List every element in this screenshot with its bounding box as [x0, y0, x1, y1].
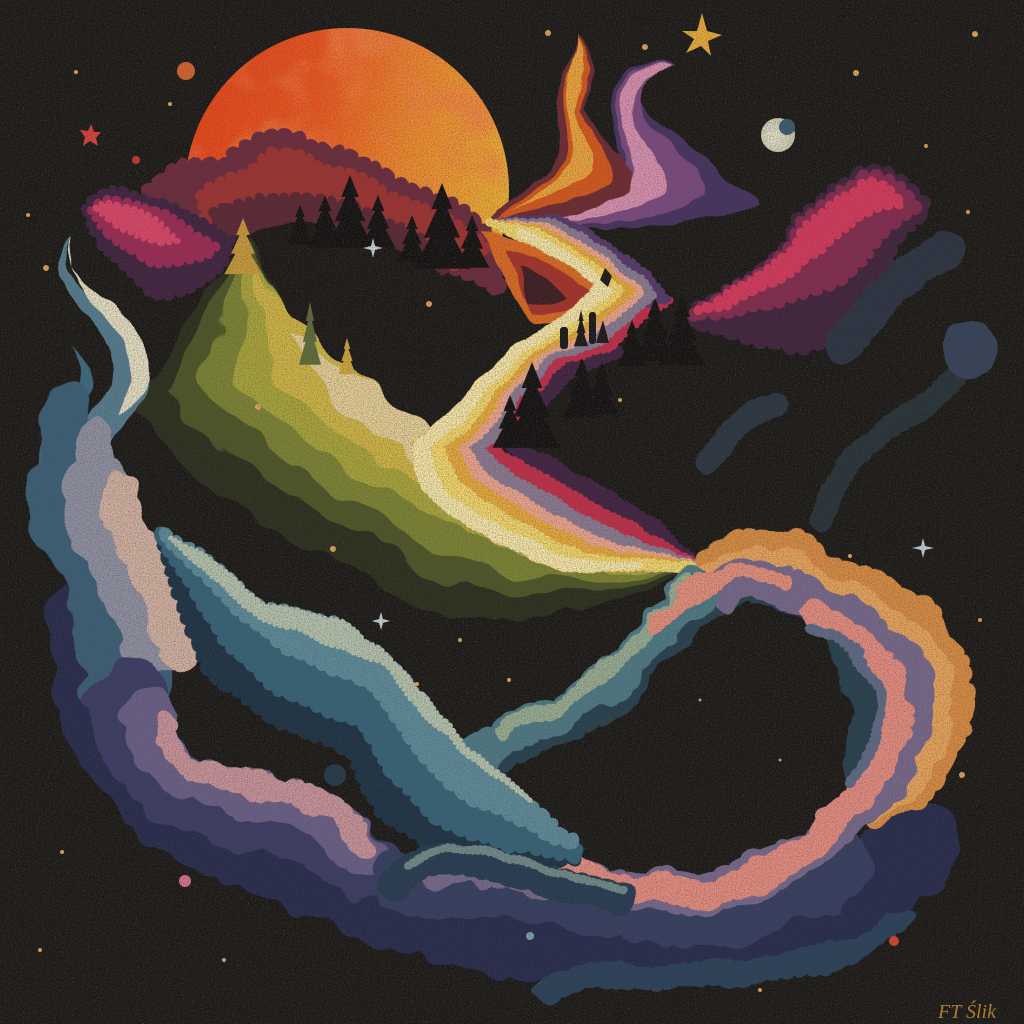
- river red band: [415, 285, 700, 568]
- left blue and pink band: [64, 415, 178, 690]
- green hill layers: [130, 235, 700, 623]
- bottom ridge: [395, 848, 625, 900]
- dark ground covering the lower moon: [170, 225, 530, 370]
- crescent planet: [761, 118, 795, 152]
- salmon ring: bottom and right: [400, 546, 960, 917]
- small orange planet: [177, 62, 195, 80]
- right smoke wisps: [705, 250, 998, 520]
- lower left mauve and pink band: [130, 700, 385, 880]
- top swirl: purple: [520, 61, 758, 229]
- inner teal ring highlights: [480, 575, 790, 755]
- river orange band: [415, 222, 700, 568]
- pocket left of the river: [480, 232, 605, 323]
- inner teal cloud: [160, 535, 580, 868]
- river cream core: [415, 232, 640, 568]
- moon: [185, 28, 509, 352]
- inner teal ring base: [470, 584, 867, 770]
- top swirl: orange: [480, 33, 633, 232]
- gold star: [682, 13, 722, 56]
- river peach band: [415, 222, 700, 568]
- blue wisp: [37, 348, 92, 500]
- rainbow river: [415, 218, 700, 568]
- forest silhouette: [287, 175, 705, 448]
- river grey band: [415, 222, 700, 568]
- clouds under the moon: [150, 136, 500, 400]
- twinkle stars: [363, 238, 934, 630]
- small bright orbs: [132, 156, 899, 946]
- river shadow: [505, 345, 700, 568]
- navy outer band: [90, 620, 925, 990]
- river yellow band: [415, 222, 700, 568]
- hikers on the river: [560, 268, 612, 349]
- red star: [80, 124, 101, 146]
- pale comet tail: [60, 235, 150, 520]
- right red cloud: [690, 173, 925, 346]
- small trees on the ridge: [224, 218, 356, 374]
- left pink cloud: [85, 192, 232, 293]
- signature: FT Ślik: [937, 999, 997, 1023]
- river purple upper edge: [490, 218, 668, 305]
